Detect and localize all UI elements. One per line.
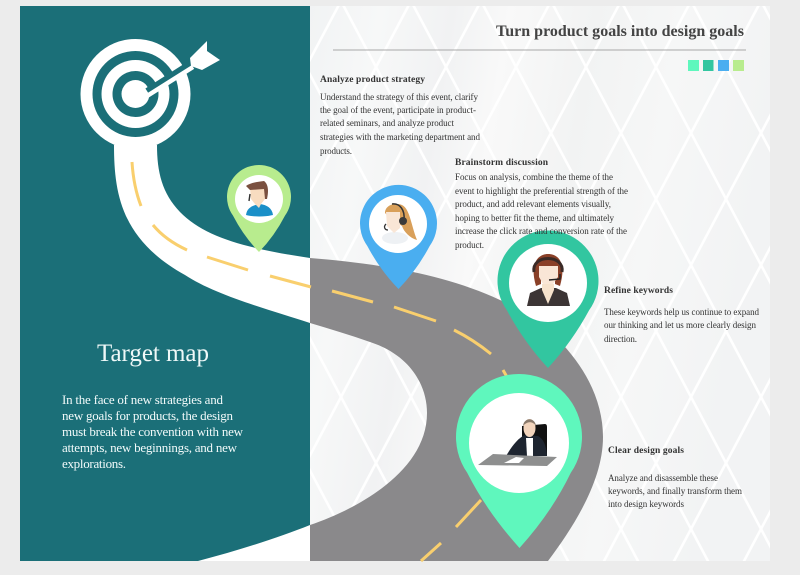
panel: right patterned background: [310, 6, 770, 561]
pin: dark green with person: [497, 230, 598, 368]
text block: Analyze product strategy: the goal of the event, participate in product-: [320, 105, 476, 115]
text block: Clear design goals: Analyze and disassemble these: [608, 473, 718, 483]
road: grey section: [310, 258, 603, 561]
text block: Brainstorm discussion: event to highlight the preferential strength of the: [455, 186, 628, 196]
text block: Analyze product strategy: related seminars, and analyze product: [320, 118, 454, 128]
icon: target with arrow: [80, 39, 220, 149]
text block: Clear design goals: keywords, and finally transform them: [608, 486, 742, 496]
road: white section: [114, 145, 310, 561]
text block: Refine keywords: [604, 286, 760, 344]
text block: Brainstorm discussion: [455, 158, 628, 250]
pin: blue with person: [360, 185, 437, 289]
text block: Refine keywords: direction.: [604, 334, 637, 344]
text block: Refine keywords: Refine keywords: [604, 286, 673, 296]
text block: Target map description: must break the convention with new: [62, 424, 244, 439]
text block: Clear design goals: [608, 446, 742, 509]
text block: Analyze product strategy: [320, 75, 480, 156]
text block: Refine keywords: These keywords help us continue to expand: [604, 307, 760, 317]
legend squares: [688, 60, 744, 71]
text block: Brainstorm discussion: increase the click rate and conversion rate of the: [455, 226, 627, 236]
pin: green with person: [227, 165, 291, 252]
text block: Brainstorm discussion: product, and add relevant elements visually,: [455, 199, 611, 209]
text block: Target map description: In the face of new strategies and: [62, 392, 224, 407]
road centre dashes: [132, 162, 507, 561]
pin: mint with person at desk: [456, 374, 582, 548]
heading: Target map: Target map: [97, 340, 209, 367]
text block: Target map description: attempts, new beginnings, and new: [62, 440, 238, 455]
text block: Brainstorm discussion: Focus on analysis, combine the theme of the: [455, 172, 613, 182]
text block: Brainstorm discussion: product.: [455, 240, 484, 250]
title: Turn product goals into design goals: [496, 23, 744, 40]
text block: Analyze product strategy: Understand the strategy of this event, clarify: [320, 92, 478, 102]
divider line under the title: [333, 50, 746, 51]
text block: Analyze product strategy: products.: [320, 146, 352, 156]
panel: left teal background: [20, 6, 310, 561]
text block: Target map description: explorations.: [62, 456, 126, 471]
text block: Analyze product strategy: Analyze product strategy: [320, 75, 425, 85]
text block: Target map description: [62, 392, 244, 471]
text block: Target map description: new goals for products, the design: [62, 408, 234, 423]
text block: Clear design goals: into design keywords: [608, 499, 684, 509]
text block: Brainstorm discussion: Brainstorm discussion: [455, 158, 549, 168]
text block: Brainstorm discussion: hoping to better fit the theme, and ultimately: [455, 213, 614, 223]
text block: Analyze product strategy: strategies with the marketing department and: [320, 132, 480, 142]
text block: Clear design goals: Clear design goals: [608, 446, 684, 456]
text block: Refine keywords: our thinking and let us more clearly design: [604, 320, 756, 330]
